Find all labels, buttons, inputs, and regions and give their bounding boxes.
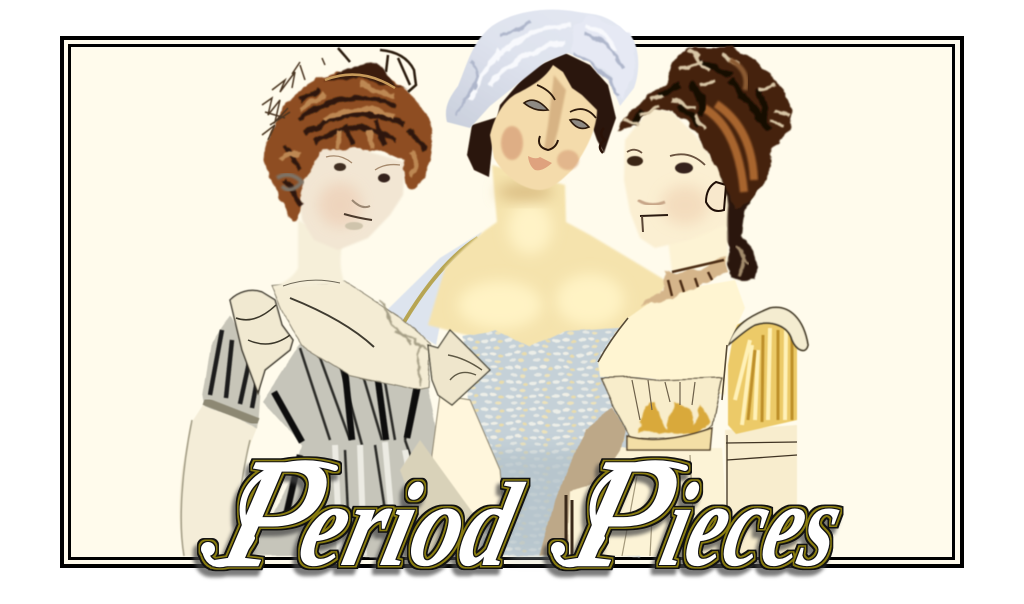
left woman striped dress bbox=[250, 345, 490, 556]
figure: centre woman with white bonnet bbox=[385, 10, 668, 556]
title word: Pieces: Pieces bbox=[555, 428, 863, 599]
left woman hair sprig bbox=[262, 58, 325, 140]
centre woman lace bodice bbox=[462, 326, 640, 556]
right woman yellow sleeve bbox=[728, 310, 797, 434]
centre woman face bbox=[490, 65, 597, 190]
centre woman blue drape bbox=[385, 232, 482, 345]
left woman puff shoulder bbox=[230, 290, 293, 393]
right woman arm bbox=[725, 425, 797, 556]
first P swash bbox=[206, 463, 335, 564]
left woman face bbox=[298, 145, 405, 250]
second P swash bbox=[556, 463, 685, 564]
right woman brown sash bbox=[540, 408, 625, 556]
centre woman neck and shoulders bbox=[428, 165, 668, 348]
right woman skirt bbox=[540, 440, 730, 556]
left woman forearm bbox=[430, 395, 503, 520]
right woman neck bbox=[668, 195, 728, 272]
left woman striped sleeve bbox=[203, 316, 262, 428]
left woman hair bbox=[266, 71, 433, 220]
centre woman hair curl bbox=[600, 128, 605, 153]
right woman waistband bbox=[627, 428, 712, 450]
frame: double black border bbox=[62, 38, 962, 566]
left woman eyes nose mouth bbox=[326, 156, 400, 230]
title: Period Pieces bbox=[201, 428, 863, 599]
title word: Period: Period bbox=[205, 428, 540, 599]
left woman capelet bbox=[272, 282, 430, 390]
left woman tiara bbox=[325, 48, 416, 92]
figure: left woman with auburn curls bbox=[179, 48, 503, 556]
left woman bare arm bbox=[179, 405, 258, 556]
right woman hair back bbox=[700, 110, 770, 280]
centre woman eyes nose mouth bbox=[524, 85, 596, 170]
centre woman bonnet bbox=[446, 10, 638, 128]
figure: right woman in yellow gown bbox=[540, 47, 808, 556]
left woman neck bbox=[272, 220, 345, 288]
left woman bow bbox=[428, 330, 490, 405]
right woman bust bbox=[598, 280, 745, 395]
right woman face bbox=[624, 108, 728, 248]
centre woman hair back bbox=[467, 53, 616, 177]
right woman choker bbox=[640, 256, 728, 305]
right woman bodice bbox=[600, 377, 722, 440]
right woman ear bbox=[706, 182, 726, 211]
right woman shoulder ruffle bbox=[728, 307, 808, 350]
right woman eyes nose mouth bbox=[627, 150, 705, 232]
right woman hair bbox=[616, 47, 792, 210]
